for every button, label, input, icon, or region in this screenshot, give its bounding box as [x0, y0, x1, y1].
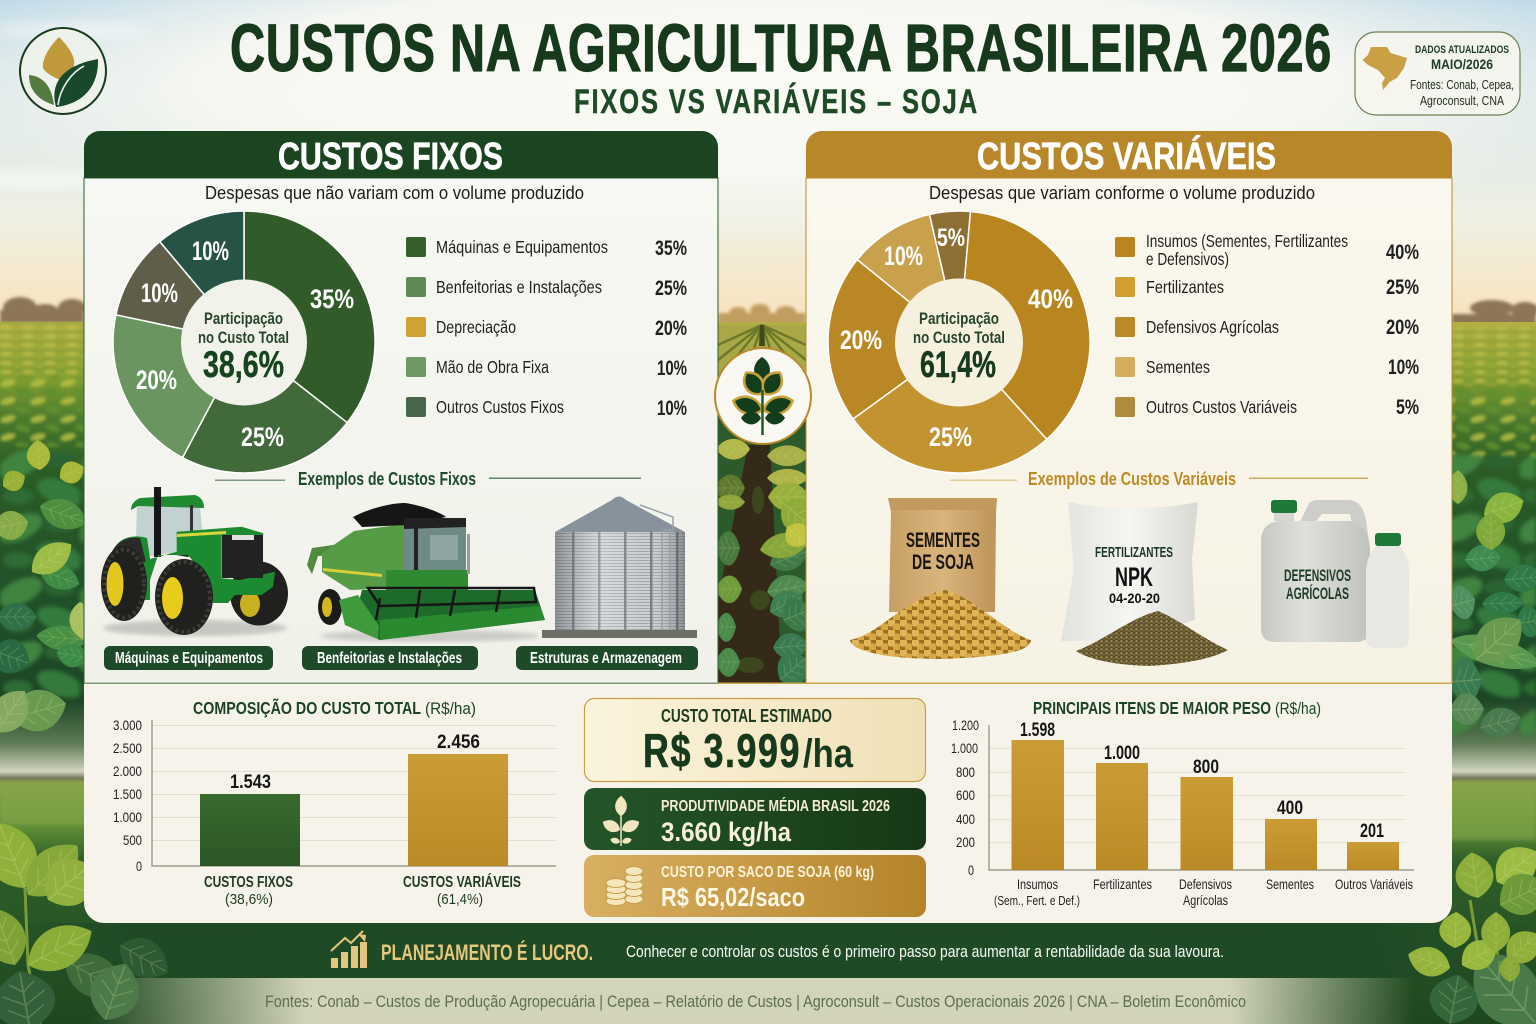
footer: sources: Fontes: Conab – Custos de Produção Agropecuária | Cepea – Relatório de Custos | Agroconsult – Custos Operacionais 2026 | CNA – Boletim Econômico [265, 992, 1246, 1011]
bar chart: principais itens: 200 [956, 834, 975, 850]
card: produtividade media: PRODUTIVIDADE MÉDIA BRASIL 2026 [661, 796, 890, 815]
bar chart: principais itens: PRINCIPAIS ITENS DE MAIOR PESO [1033, 698, 1271, 718]
bar chart: composicao do custo total: COMPOSIÇÃO DO CUSTO TOTAL [193, 697, 421, 718]
legend: custos variaveis: Sementes [1146, 357, 1210, 377]
panel header: custos fixos: CUSTOS FIXOS [278, 136, 503, 178]
icon: pesticide jug and bottle: AGRÍCOLAS [1286, 584, 1349, 603]
legend: custos variaveis: Insumos (Sementes, Fertilizantes [1146, 231, 1348, 251]
panel header: custos fixos [84, 131, 718, 178]
card: custo total estimado: R$ 3.999 [643, 724, 801, 777]
bar chart: composicao do custo total: 1.543 [230, 771, 271, 793]
icon: fertilizer bag with pellets [1061, 502, 1228, 666]
bar chart: principais itens: Fertilizantes [1093, 876, 1152, 892]
bar chart: principais itens: (R$/ha) [1275, 699, 1321, 718]
bar chart: composicao do custo total: 3.000 [113, 717, 142, 733]
update badge [1355, 32, 1520, 115]
legend: custos variaveis: 5% [1396, 396, 1419, 419]
center field row: soil and soy leaves [715, 439, 825, 692]
legend: custos variaveis: 25% [1386, 276, 1419, 299]
card: custo total estimado: CUSTO TOTAL ESTIMADO [661, 706, 832, 726]
donut chart: custos variaveis: 10% [884, 241, 923, 271]
legend: custos fixos: Depreciação [436, 317, 516, 337]
donut chart: custos variaveis: Participação [919, 309, 999, 328]
bar chart: composicao do custo total: 2.500 [113, 740, 142, 756]
card: produtividade media [584, 788, 926, 850]
caption pills: fixed cost examples: Benfeitorias e Instalações [317, 650, 462, 667]
corner foliage [0, 814, 1536, 1024]
bar chart: principais itens: 800 [1193, 757, 1219, 778]
legend: custos fixos: 10% [657, 357, 687, 380]
panel header: custos variaveis: CUSTOS VARIÁVEIS [977, 134, 1276, 178]
bar chart: composicao do custo total: CUSTOS FIXOS [204, 874, 293, 891]
center emblem: soy plant [715, 348, 811, 444]
card: custo total estimado [584, 698, 926, 782]
caption pills: fixed cost examples: Máquinas e Equipamentos [115, 650, 263, 667]
bar chart: composicao do custo total: (38,6%) [225, 891, 273, 908]
bar chart: principais itens: (Sem., Fert. e Def.) [994, 893, 1080, 908]
legend: custos fixos: 10% [657, 397, 687, 420]
bar chart: composicao do custo total: 1.000 [113, 809, 142, 825]
bar chart: composicao do custo total: 0 [136, 858, 142, 874]
icon: seed sack with soybeans: DE SOJA [912, 551, 974, 574]
bar chart: composicao do custo total: 2.000 [113, 763, 142, 779]
icon: pesticide jug and bottle: DEFENSIVOS [1284, 567, 1351, 585]
examples heading: custos fixos: Exemplos de Custos Fixos [298, 469, 476, 489]
bar chart: principais itens: 0 [968, 862, 974, 878]
panel description: Despesas que não variam com o volume produzido [205, 183, 584, 203]
donut chart: custos fixos: 10% [141, 278, 178, 308]
donut chart: custos fixos: no Custo Total [198, 328, 289, 347]
banner: planejamento e lucro: Conhecer e controlar os custos é o primeiro passo para aumentar a rentabilidade da sua lavoura. [626, 942, 1224, 961]
bar chart: principais itens: 1.200 [952, 717, 979, 733]
donut chart: custos variaveis: 61,4% [920, 344, 996, 385]
donut chart: custos fixos: 38,6% [203, 344, 284, 385]
icon: fertilizer bag with pellets: 04-20-20 [1109, 590, 1160, 606]
legend: custos fixos: Benfeitorias e Instalações [436, 277, 602, 297]
legend: custos variaveis: Outros Custos Variáveis [1146, 397, 1297, 417]
legend: custos variaveis [1115, 231, 1419, 419]
donut chart: custos fixos [113, 211, 375, 473]
icon: seed sack with soybeans [850, 498, 1031, 659]
bar chart: principais itens: Insumos [1017, 876, 1058, 892]
bar chart: principais itens: 201 [1360, 821, 1384, 842]
panel: bottom charts and figures [84, 682, 1452, 923]
bar chart: principais itens: 400 [1277, 798, 1303, 819]
icon: fertilizer bag with pellets: FERTILIZANTES [1095, 544, 1173, 561]
bar chart: composicao do custo total: 2.456 [437, 731, 480, 753]
legend: custos fixos: 25% [655, 277, 687, 300]
icon: map of Brazil [1362, 47, 1407, 90]
donut chart: custos fixos: 20% [136, 365, 177, 395]
donut chart: custos fixos: 25% [241, 422, 284, 452]
donut chart: custos fixos: Participação [204, 309, 283, 328]
card: custo por saco: R$ 65,02/saco [661, 882, 805, 912]
caption pills: fixed cost examples [104, 646, 698, 670]
donut chart: custos variaveis [828, 211, 1090, 473]
legend: custos fixos: Mão de Obra Fixa [436, 357, 549, 377]
donut chart: custos variaveis: 20% [840, 325, 882, 355]
subtitle: FIXOS VS VARIÁVEIS – SOJA [574, 83, 979, 121]
update badge: MAIO/2026 [1431, 56, 1493, 72]
legend: custos variaveis: Defensivos Agrícolas [1146, 317, 1279, 337]
bar chart: principais itens: 1.000 [951, 740, 978, 756]
bar chart: composicao do custo total: 1.500 [113, 786, 142, 802]
icon: rising bar chart [331, 931, 367, 968]
bar chart: principais itens: Agrícolas [1183, 892, 1228, 908]
legend: custos fixos [406, 237, 687, 420]
panel: custos variaveis [806, 131, 1452, 683]
bar chart: composicao do custo total: 500 [123, 832, 142, 848]
legend: custos fixos: 35% [655, 237, 687, 260]
donut chart: custos fixos: 10% [192, 236, 229, 266]
icon: fertilizer bag with pellets: NPK [1115, 562, 1153, 592]
donut chart: custos fixos: 35% [310, 284, 354, 314]
icon: combine harvester [307, 503, 545, 642]
bar chart: principais itens: 1.598 [1020, 720, 1055, 741]
panel description: Despesas que variam conforme o volume produzido [929, 183, 1315, 203]
icon: soy plant [600, 796, 642, 846]
right field foliage [1445, 470, 1536, 742]
examples heading: custos variaveis: Exemplos de Custos Variáveis [1028, 469, 1236, 489]
panel header: custos variaveis [806, 131, 1452, 178]
donut chart: custos variaveis: 25% [929, 422, 972, 452]
bar chart: principais itens: Sementes [1266, 876, 1314, 892]
legend: custos variaveis: 40% [1386, 241, 1419, 264]
donut chart: custos variaveis: no Custo Total [913, 328, 1005, 347]
legend: custos variaveis: Fertilizantes [1146, 277, 1224, 297]
bar chart: principais itens: 600 [956, 787, 975, 803]
legend: custos fixos: Máquinas e Equipamentos [436, 237, 608, 257]
banner: planejamento e lucro [0, 923, 1536, 978]
bar chart: composicao do custo total: CUSTOS VARIÁVEIS [403, 874, 521, 891]
update badge: DADOS ATUALIZADOS [1415, 44, 1509, 56]
icon: coin stacks [606, 866, 643, 906]
banner: planejamento e lucro: PLANEJAMENTO É LUCRO. [381, 940, 593, 965]
bar chart: composicao do custo total: (R$/ha) [425, 699, 476, 718]
card: produtividade media: 3.660 kg/ha [661, 817, 792, 847]
legend: custos variaveis: 10% [1388, 356, 1419, 379]
bar chart: principais itens: Outros Variáveis [1335, 876, 1413, 892]
bar chart: principais itens: 800 [956, 764, 975, 780]
bar chart: composicao do custo total: (61,4%) [437, 891, 483, 908]
caption pills: fixed cost examples: Estruturas e Armazenagem [530, 650, 682, 667]
bar chart: principais itens: 1.000 [1104, 743, 1140, 764]
legend: custos variaveis: e Defensivos) [1146, 249, 1229, 269]
icon: grain silo [542, 496, 697, 638]
update badge: Agroconsult, CNA [1420, 93, 1504, 108]
left field foliage [0, 439, 96, 742]
card: custo por saco: CUSTO POR SACO DE SOJA (60 kg) [661, 864, 874, 881]
panel: custos fixos [84, 131, 718, 683]
icon: pesticide jug and bottle [1261, 500, 1409, 648]
bar chart: principais itens: Defensivos [1179, 876, 1232, 892]
bar chart: principais itens: 400 [956, 811, 975, 827]
legend: custos variaveis: 20% [1386, 316, 1419, 339]
footer: sources [0, 978, 1536, 1024]
icon: seed sack with soybeans: SEMENTES [906, 529, 980, 552]
bar chart: composicao do custo total [113, 697, 556, 908]
legend: custos fixos: 20% [655, 317, 687, 340]
card: custo total estimado: /ha [803, 732, 854, 776]
logo [20, 28, 106, 114]
card: custo por saco [584, 855, 926, 917]
donut chart: custos variaveis: 5% [937, 224, 965, 252]
bar chart: principais itens [951, 698, 1414, 908]
icon: tractor [101, 487, 288, 636]
legend: custos fixos: Outros Custos Fixos [436, 397, 564, 417]
donut chart: custos variaveis: 40% [1028, 284, 1073, 314]
